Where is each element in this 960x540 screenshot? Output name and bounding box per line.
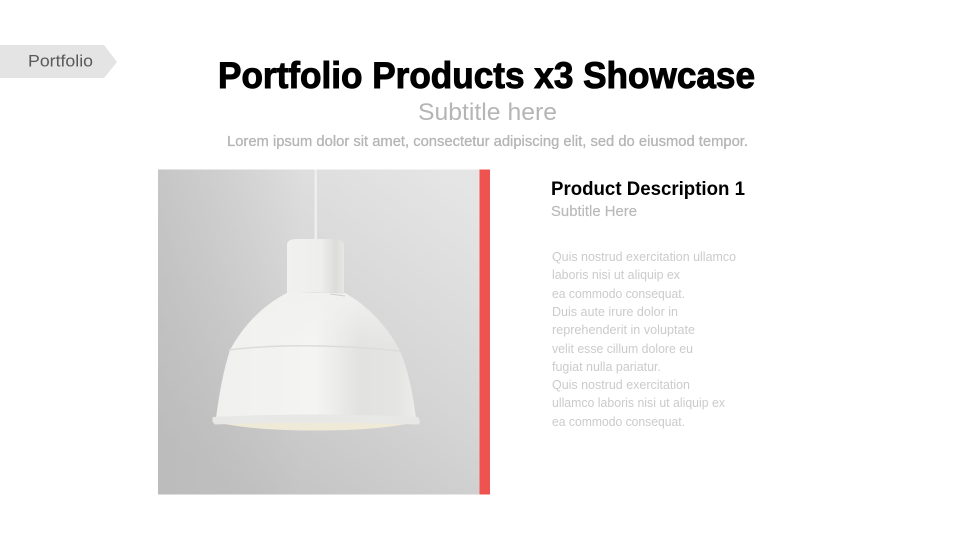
lamp band seam — [229, 346, 400, 351]
lamp neck — [287, 239, 344, 294]
subtitle: Subtitle here — [418, 99, 557, 126]
product body text: ea commodo consequat. — [552, 287, 685, 301]
product subtitle: Subtitle Here — [551, 204, 637, 220]
product body text: ea commodo consequat. — [552, 415, 685, 429]
red accent bar — [480, 170, 490, 494]
product body text: laboris nisi ut aliquip ex — [552, 268, 681, 282]
lamp cord — [314, 170, 317, 240]
product body text: fugiat nulla pariatur. — [552, 360, 661, 374]
product body text — [552, 250, 736, 429]
title: Portfolio Products x3 Showcase — [218, 55, 755, 96]
product heading: Product Description 1 — [551, 179, 745, 200]
lamp inner light — [216, 422, 416, 430]
lamp shade body — [216, 293, 416, 418]
lamp rim — [212, 414, 420, 424]
section tag: Portfolio — [0, 45, 117, 78]
product photo: pendant lamp — [158, 170, 480, 494]
product body text: reprehenderit in voluptate — [552, 323, 695, 337]
product description — [551, 179, 745, 429]
product body text: velit esse cillum dolore eu — [552, 342, 693, 356]
section tag: Portfolio: Portfolio — [28, 52, 93, 70]
product body text: ullamco laboris nisi ut aliquip ex — [552, 396, 726, 410]
lamp shade highlight — [216, 293, 416, 418]
product body text: Quis nostrud exercitation — [552, 378, 690, 392]
product body text: Duis aute irure dolor in — [552, 305, 678, 319]
product body text: Quis nostrud exercitation ullamco — [552, 250, 736, 264]
intro text: Lorem ipsum dolor sit amet, consectetur adipiscing elit, sed do eiusmod tempor. — [227, 133, 748, 150]
lamp neck collar seam — [330, 294, 345, 296]
